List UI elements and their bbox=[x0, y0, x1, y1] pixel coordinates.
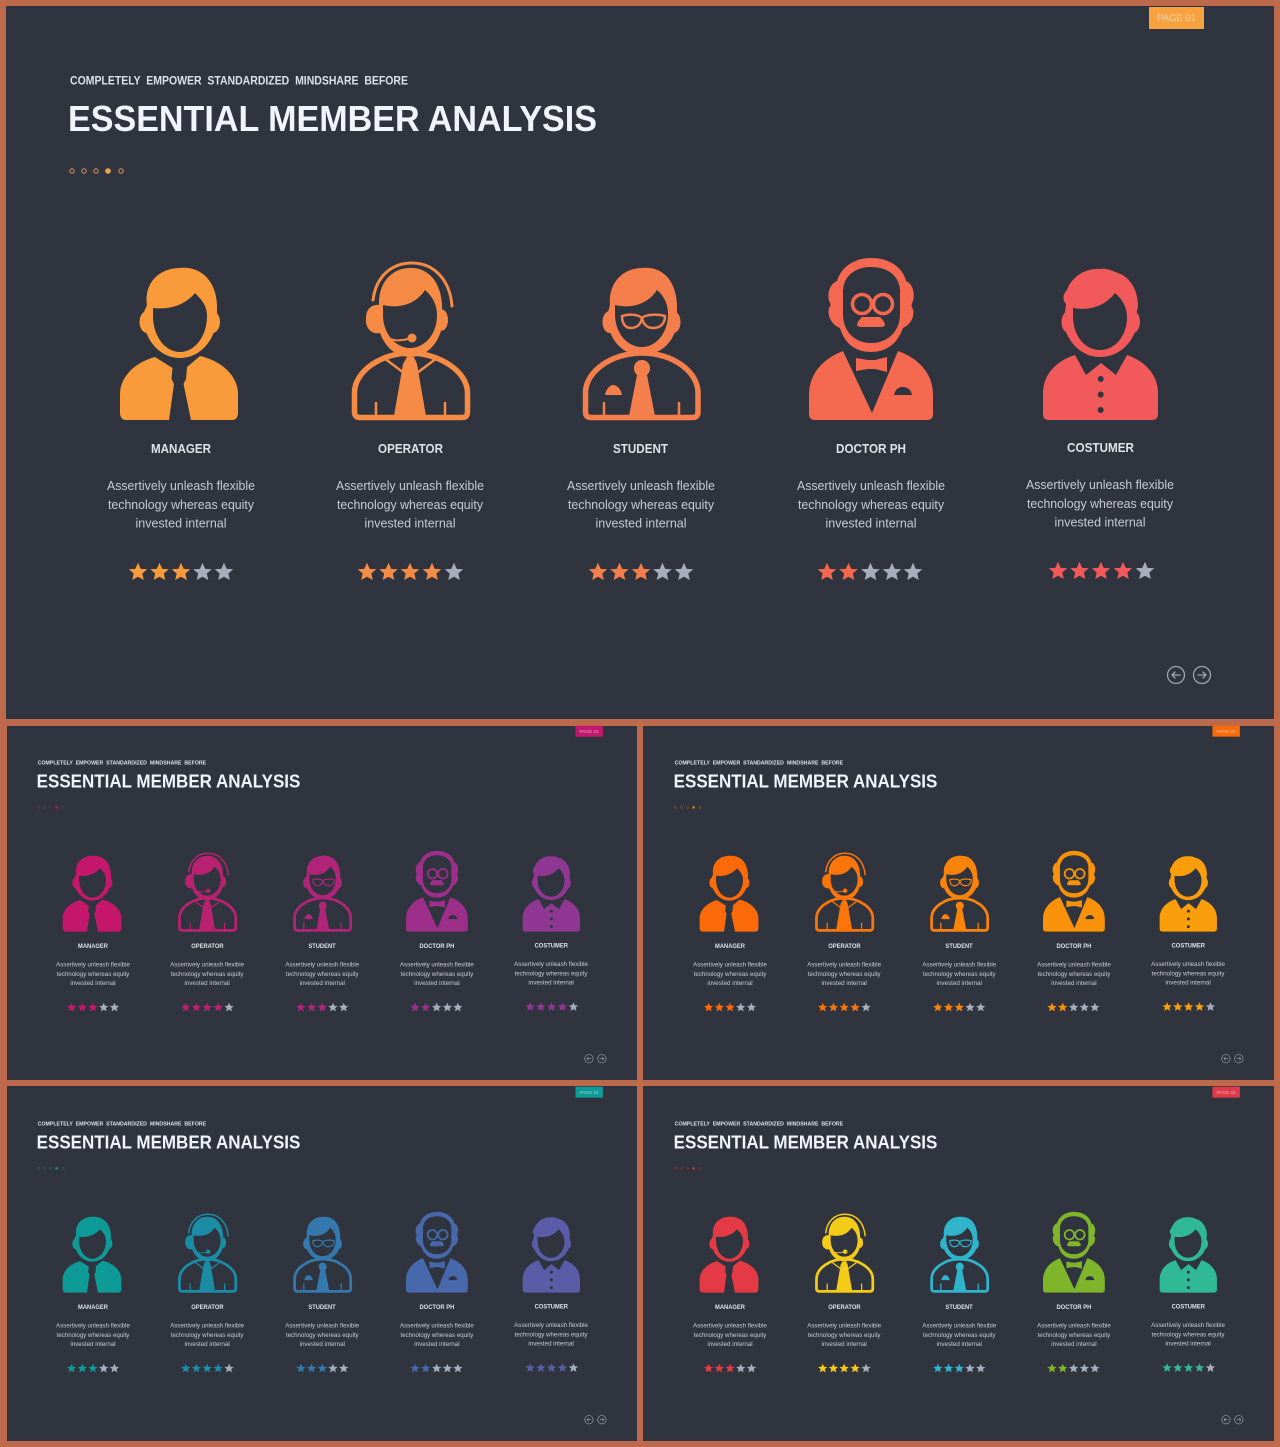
rating: student bbox=[296, 1003, 348, 1011]
rating: manager bbox=[67, 1003, 119, 1011]
description: doctor: invested internal bbox=[1051, 980, 1097, 987]
navigation arrows bbox=[1222, 1054, 1243, 1063]
label: student: STUDENT bbox=[945, 1304, 973, 1311]
description: doctor: invested internal bbox=[414, 1341, 460, 1348]
navigation arrows bbox=[585, 1415, 606, 1424]
description: student bbox=[922, 961, 997, 987]
card: operator bbox=[170, 1214, 244, 1372]
card: doctor bbox=[400, 851, 474, 1011]
subtitle: COMPLETELY EMPOWER STANDARDIZED MINDSHARE BEFORE bbox=[38, 760, 206, 766]
card: operator bbox=[336, 263, 484, 580]
description: manager bbox=[693, 961, 767, 987]
description: costumer: Assertively unleash flexible bbox=[1026, 477, 1174, 492]
description: manager bbox=[107, 478, 255, 530]
description: operator: Assertively unleash flexible bbox=[170, 961, 244, 968]
description: costumer: invested internal bbox=[1054, 514, 1146, 530]
icon: costumer bbox=[1043, 269, 1158, 420]
icon: manager bbox=[63, 856, 121, 932]
description: costumer bbox=[1151, 961, 1225, 987]
description: student bbox=[567, 478, 715, 530]
label: student: STUDENT bbox=[945, 943, 973, 950]
icon: manager bbox=[120, 268, 238, 420]
label: operator: OPERATOR bbox=[828, 1304, 861, 1311]
description: costumer: technology whereas equity bbox=[515, 970, 588, 977]
rating: student bbox=[933, 1003, 985, 1011]
rating: manager bbox=[704, 1003, 756, 1011]
description: operator: Assertively unleash flexible bbox=[807, 1322, 881, 1329]
description: doctor: Assertively unleash flexible bbox=[1037, 961, 1111, 968]
description: doctor bbox=[1037, 1322, 1111, 1348]
subtitle: COMPLETELY EMPOWER STANDARDIZED MINDSHARE BEFORE bbox=[38, 1121, 206, 1127]
rating: doctor bbox=[1047, 1364, 1099, 1372]
card: manager bbox=[107, 268, 255, 580]
description: student: invested internal bbox=[937, 1341, 982, 1348]
page badge bbox=[575, 726, 603, 737]
description: costumer: technology whereas equity bbox=[1152, 1331, 1225, 1338]
description: student: technology whereas equity bbox=[286, 971, 359, 978]
description: student bbox=[922, 1322, 997, 1348]
description: manager: technology whereas equity bbox=[57, 971, 130, 978]
description: operator: Assertively unleash flexible bbox=[807, 961, 881, 968]
card: student bbox=[922, 856, 997, 1011]
card: operator bbox=[807, 1214, 881, 1372]
rating: operator bbox=[181, 1003, 234, 1011]
description: doctor: technology whereas equity bbox=[1038, 1332, 1111, 1339]
pagination dots bbox=[70, 169, 123, 173]
title: ESSENTIAL MEMBER ANALYSIS bbox=[674, 1132, 937, 1152]
description: costumer: Assertively unleash flexible bbox=[1151, 1322, 1225, 1329]
page badge bbox=[1212, 726, 1240, 737]
description: manager bbox=[693, 1322, 767, 1348]
rating: student bbox=[589, 563, 693, 580]
rating: doctor bbox=[818, 563, 922, 580]
label: operator: OPERATOR bbox=[828, 943, 861, 950]
description: manager: invested internal bbox=[136, 516, 227, 530]
description: operator: invested internal bbox=[184, 1341, 230, 1348]
description: student: technology whereas equity bbox=[286, 1332, 359, 1339]
card: costumer bbox=[514, 1217, 588, 1372]
description: manager: technology whereas equity bbox=[57, 1332, 130, 1339]
rating: doctor bbox=[410, 1364, 462, 1372]
description: student: Assertively unleash flexible bbox=[285, 961, 360, 968]
icon: operator bbox=[816, 1214, 873, 1291]
rating: costumer bbox=[525, 1363, 578, 1372]
description: operator bbox=[170, 1322, 244, 1348]
label: costumer: COSTUMER bbox=[1172, 943, 1205, 950]
description: student: Assertively unleash flexible bbox=[922, 961, 997, 968]
title: ESSENTIAL MEMBER ANALYSIS bbox=[37, 1132, 300, 1152]
panel: orange slide bbox=[643, 726, 1274, 1080]
rating: manager bbox=[704, 1364, 756, 1372]
description: manager: technology whereas equity bbox=[108, 497, 254, 512]
description: operator: invested internal bbox=[821, 980, 867, 987]
label: costumer: COSTUMER bbox=[535, 1304, 568, 1311]
rating: costumer bbox=[1162, 1363, 1215, 1372]
card: manager bbox=[693, 1217, 767, 1372]
page badge: PAGE 01 bbox=[1217, 1090, 1236, 1096]
description: doctor: invested internal bbox=[414, 980, 460, 987]
rating: student bbox=[296, 1364, 348, 1372]
card: costumer bbox=[1026, 269, 1174, 579]
description: doctor: invested internal bbox=[1051, 1341, 1097, 1348]
description: costumer bbox=[514, 961, 588, 987]
card: manager bbox=[693, 856, 767, 1011]
description: student: technology whereas equity bbox=[923, 971, 996, 978]
description: manager: Assertively unleash flexible bbox=[693, 1322, 767, 1329]
description: doctor: Assertively unleash flexible bbox=[400, 961, 474, 968]
rating: operator bbox=[358, 563, 463, 580]
label: manager: MANAGER bbox=[715, 943, 745, 950]
label: operator: OPERATOR bbox=[378, 441, 444, 456]
rating: student bbox=[933, 1364, 985, 1372]
description: manager: technology whereas equity bbox=[694, 1332, 767, 1339]
icon: manager bbox=[700, 856, 758, 932]
description: doctor: Assertively unleash flexible bbox=[400, 1322, 474, 1329]
description: doctor: Assertively unleash flexible bbox=[1037, 1322, 1111, 1329]
description: doctor bbox=[400, 961, 474, 987]
description: operator: technology whereas equity bbox=[808, 1332, 881, 1339]
label: costumer: COSTUMER bbox=[1067, 440, 1135, 455]
description: operator: Assertively unleash flexible bbox=[336, 478, 484, 493]
panel: multicolour slide bbox=[643, 1086, 1274, 1441]
description: costumer: Assertively unleash flexible bbox=[1151, 961, 1225, 968]
label: student: STUDENT bbox=[308, 943, 336, 950]
label: operator: OPERATOR bbox=[191, 943, 224, 950]
card: doctor bbox=[797, 258, 945, 580]
card: manager bbox=[56, 856, 130, 1011]
description: costumer: invested internal bbox=[1165, 980, 1211, 987]
label: student: STUDENT bbox=[308, 1304, 336, 1311]
title: ESSENTIAL MEMBER ANALYSIS bbox=[674, 771, 937, 791]
page badge: PAGE 01 bbox=[580, 1090, 599, 1096]
description: manager: Assertively unleash flexible bbox=[693, 961, 767, 968]
icon: operator bbox=[179, 853, 236, 930]
rating: costumer bbox=[1162, 1002, 1215, 1011]
icon: student bbox=[586, 268, 698, 418]
description: manager bbox=[56, 1322, 130, 1348]
rating: manager bbox=[67, 1364, 119, 1372]
description: operator: invested internal bbox=[821, 1341, 867, 1348]
navigation arrows bbox=[585, 1054, 606, 1063]
description: student bbox=[285, 1322, 360, 1348]
description: costumer: technology whereas equity bbox=[515, 1331, 588, 1338]
description: manager: Assertively unleash flexible bbox=[56, 1322, 130, 1329]
description: operator: invested internal bbox=[364, 516, 456, 530]
description: manager: technology whereas equity bbox=[694, 971, 767, 978]
rating: operator bbox=[818, 1003, 871, 1011]
description: operator: Assertively unleash flexible bbox=[170, 1322, 244, 1329]
icon: manager bbox=[63, 1217, 121, 1293]
description: manager bbox=[56, 961, 130, 987]
description: doctor bbox=[797, 478, 945, 530]
icon: student bbox=[295, 856, 351, 930]
description: costumer: invested internal bbox=[1165, 1341, 1211, 1348]
card: manager bbox=[56, 1217, 130, 1372]
navigation arrows bbox=[1222, 1415, 1243, 1424]
description: manager: invested internal bbox=[707, 980, 753, 987]
card: student bbox=[922, 1217, 997, 1372]
pagination dots bbox=[675, 1167, 701, 1170]
description: doctor: invested internal bbox=[826, 516, 917, 530]
label: manager: MANAGER bbox=[78, 943, 108, 950]
title: ESSENTIAL MEMBER ANALYSIS bbox=[37, 771, 300, 791]
panel: teal and blue slide bbox=[7, 1086, 637, 1441]
page badge bbox=[1149, 7, 1204, 29]
label: manager: MANAGER bbox=[151, 441, 212, 456]
card: costumer bbox=[514, 856, 588, 1011]
description: student bbox=[285, 961, 360, 987]
icon: costumer bbox=[1160, 856, 1217, 932]
description: operator: technology whereas equity bbox=[337, 497, 483, 512]
description: student: technology whereas equity bbox=[568, 497, 714, 512]
description: costumer: Assertively unleash flexible bbox=[514, 961, 588, 968]
page badge: PAGE 01 bbox=[580, 729, 599, 735]
description: manager: Assertively unleash flexible bbox=[56, 961, 130, 968]
description: operator bbox=[170, 961, 244, 987]
icon: doctor bbox=[1043, 851, 1105, 932]
description: manager: Assertively unleash flexible bbox=[107, 478, 255, 493]
description: student: technology whereas equity bbox=[923, 1332, 996, 1339]
label: doctor: DOCTOR PH bbox=[419, 943, 455, 950]
description: doctor: technology whereas equity bbox=[401, 971, 474, 978]
description: costumer bbox=[1026, 477, 1174, 530]
description: student: invested internal bbox=[300, 980, 345, 987]
subtitle: COMPLETELY EMPOWER STANDARDIZED MINDSHARE BEFORE bbox=[675, 1121, 843, 1127]
icon: doctor bbox=[406, 851, 468, 932]
panel: main slide, warm orange palette bbox=[6, 6, 1274, 719]
card: costumer bbox=[1151, 856, 1225, 1011]
description: operator bbox=[807, 961, 881, 987]
label: operator: OPERATOR bbox=[191, 1304, 224, 1311]
icon: costumer bbox=[523, 856, 580, 932]
title: ESSENTIAL MEMBER ANALYSIS bbox=[68, 98, 597, 139]
description: manager: invested internal bbox=[707, 1341, 753, 1348]
rating: operator bbox=[818, 1364, 871, 1372]
icon: operator bbox=[354, 263, 468, 418]
navigation arrows bbox=[1168, 666, 1210, 684]
card: student bbox=[567, 268, 715, 580]
icon: student bbox=[932, 1217, 988, 1291]
icon: doctor bbox=[1043, 1212, 1105, 1293]
icon: operator bbox=[179, 1214, 236, 1291]
description: operator: invested internal bbox=[184, 980, 230, 987]
description: student: Assertively unleash flexible bbox=[922, 1322, 997, 1329]
rating: costumer bbox=[1049, 562, 1154, 579]
label: manager: MANAGER bbox=[715, 1304, 745, 1311]
description: costumer bbox=[514, 1322, 588, 1348]
description: operator: technology whereas equity bbox=[808, 971, 881, 978]
icon: doctor bbox=[406, 1212, 468, 1293]
card: doctor bbox=[400, 1212, 474, 1372]
description: doctor: technology whereas equity bbox=[1038, 971, 1111, 978]
description: doctor: technology whereas equity bbox=[401, 1332, 474, 1339]
description: doctor bbox=[400, 1322, 474, 1348]
page badge: PAGE 01 bbox=[1217, 729, 1236, 735]
description: doctor bbox=[1037, 961, 1111, 987]
page badge bbox=[1212, 1087, 1240, 1098]
subtitle: COMPLETELY EMPOWER STANDARDIZED MINDSHARE BEFORE bbox=[675, 760, 843, 766]
rating: costumer bbox=[525, 1002, 578, 1011]
icon: manager bbox=[700, 1217, 758, 1293]
page badge: PAGE 01 bbox=[1157, 13, 1196, 24]
description: costumer: invested internal bbox=[528, 1341, 574, 1348]
description: costumer: Assertively unleash flexible bbox=[514, 1322, 588, 1329]
description: student: Assertively unleash flexible bbox=[567, 478, 715, 493]
description: manager: invested internal bbox=[70, 980, 116, 987]
description: student: Assertively unleash flexible bbox=[285, 1322, 360, 1329]
card: operator bbox=[807, 853, 881, 1011]
description: student: invested internal bbox=[596, 516, 687, 530]
description: student: invested internal bbox=[300, 1341, 345, 1348]
rating: doctor bbox=[410, 1003, 462, 1011]
label: manager: MANAGER bbox=[78, 1304, 108, 1311]
icon: costumer bbox=[1160, 1217, 1217, 1293]
label: costumer: COSTUMER bbox=[535, 943, 568, 950]
description: operator: technology whereas equity bbox=[171, 1332, 244, 1339]
panel: magenta slide bbox=[7, 726, 637, 1080]
description: costumer: invested internal bbox=[528, 980, 574, 987]
description: costumer: technology whereas equity bbox=[1152, 970, 1225, 977]
subtitle: COMPLETELY EMPOWER STANDARDIZED MINDSHARE BEFORE bbox=[70, 76, 408, 88]
card: student bbox=[285, 856, 360, 1011]
label: doctor: DOCTOR PH bbox=[419, 1304, 455, 1311]
description: costumer: technology whereas equity bbox=[1027, 496, 1173, 511]
icon: costumer bbox=[523, 1217, 580, 1293]
label: student: STUDENT bbox=[613, 441, 668, 456]
card: doctor bbox=[1037, 1212, 1111, 1372]
card: student bbox=[285, 1217, 360, 1372]
description: operator: technology whereas equity bbox=[171, 971, 244, 978]
icon: student bbox=[295, 1217, 351, 1291]
description: doctor: Assertively unleash flexible bbox=[797, 478, 945, 493]
label: costumer: COSTUMER bbox=[1172, 1304, 1205, 1311]
rating: operator bbox=[181, 1364, 234, 1372]
icon: student bbox=[932, 856, 988, 930]
card: operator bbox=[170, 853, 244, 1011]
rating: doctor bbox=[1047, 1003, 1099, 1011]
page badge bbox=[575, 1087, 603, 1098]
pagination dots bbox=[675, 806, 701, 809]
description: operator bbox=[336, 478, 484, 530]
description: student: invested internal bbox=[937, 980, 982, 987]
label: doctor: DOCTOR PH bbox=[1056, 1304, 1092, 1311]
description: manager: invested internal bbox=[70, 1341, 116, 1348]
card: doctor bbox=[1037, 851, 1111, 1011]
icon: operator bbox=[816, 853, 873, 930]
pagination dots bbox=[38, 1167, 64, 1170]
description: costumer bbox=[1151, 1322, 1225, 1348]
pagination dots bbox=[38, 806, 64, 809]
label: doctor: DOCTOR PH bbox=[836, 441, 906, 456]
rating: manager bbox=[129, 563, 233, 580]
description: operator bbox=[807, 1322, 881, 1348]
card: costumer bbox=[1151, 1217, 1225, 1372]
description: doctor: technology whereas equity bbox=[798, 497, 944, 512]
label: doctor: DOCTOR PH bbox=[1056, 943, 1092, 950]
icon: doctor bbox=[809, 258, 933, 420]
